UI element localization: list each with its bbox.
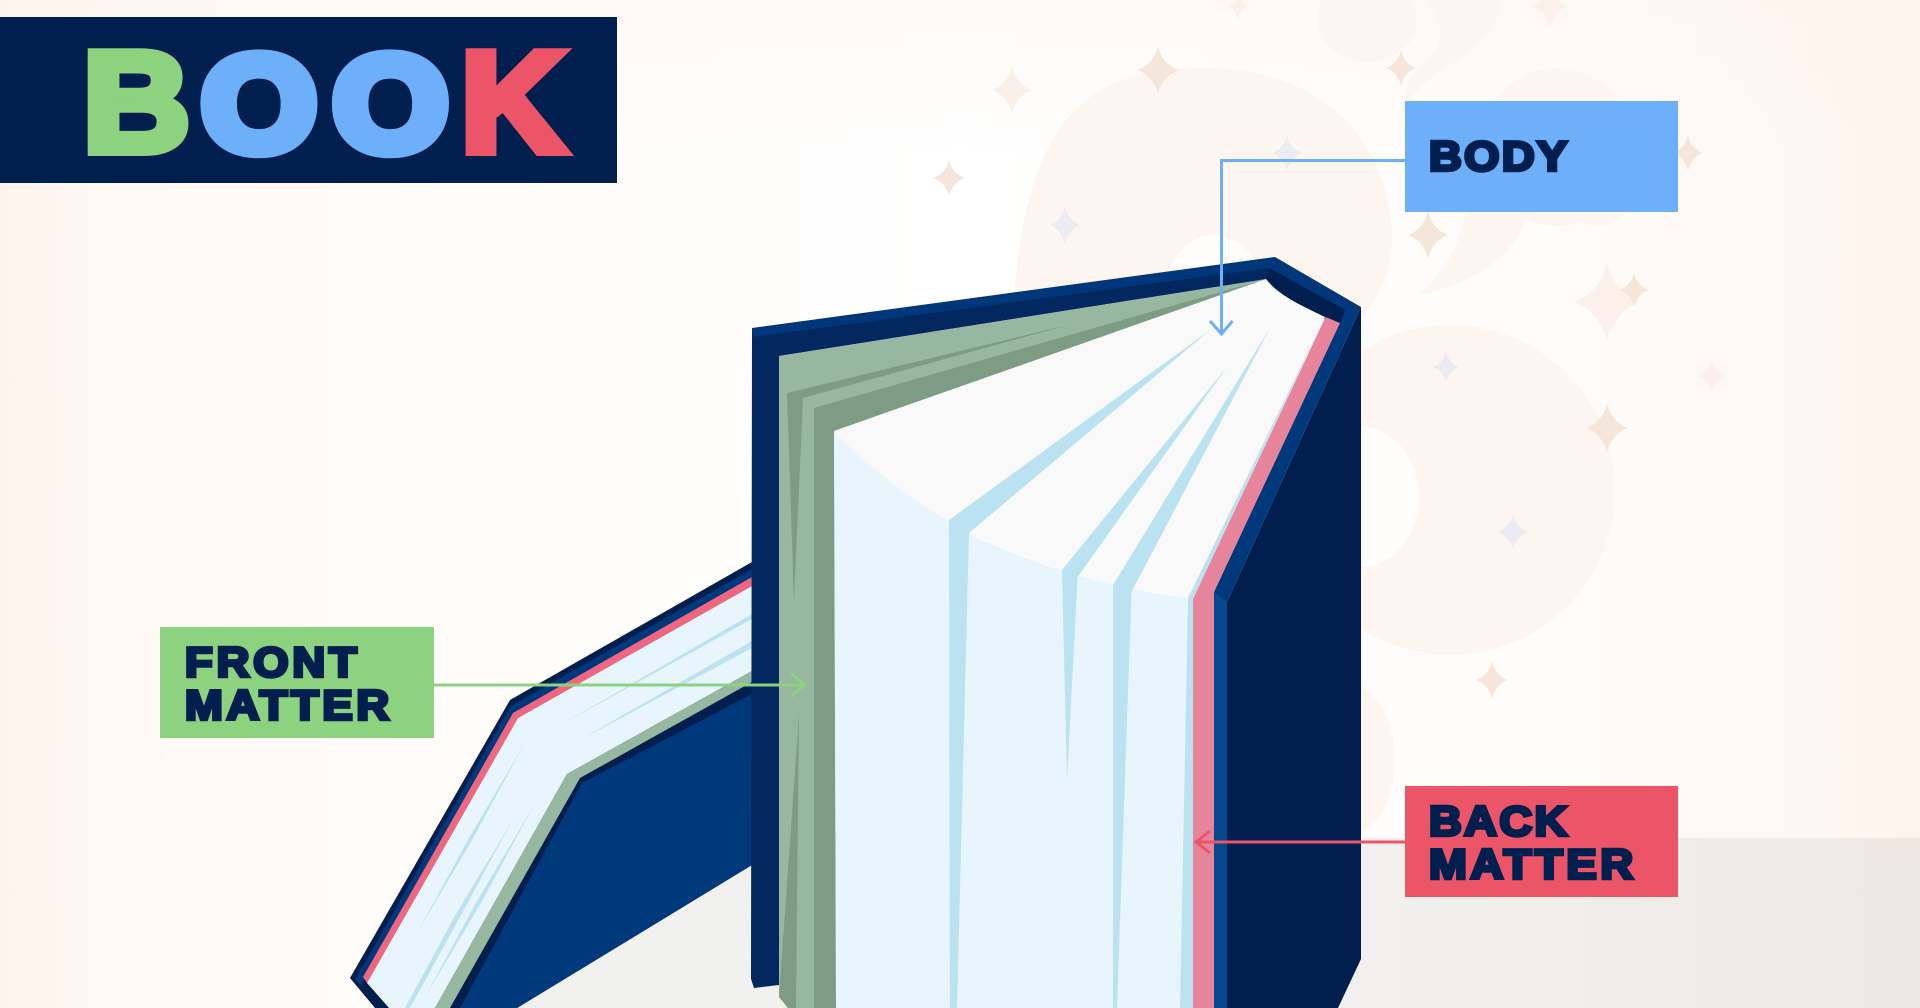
light blue page streaks bbox=[949, 317, 1325, 1008]
title letter O: O bbox=[334, 30, 448, 179]
callout: back matter: BACK bbox=[1429, 798, 1568, 845]
title letter O: O bbox=[202, 30, 316, 179]
spine stripe bbox=[1214, 307, 1361, 1008]
arrow: front matter bbox=[434, 673, 804, 697]
green page edge bbox=[435, 671, 752, 1008]
top page surface bbox=[834, 279, 1325, 598]
front pages bbox=[367, 586, 752, 1008]
callout: body: BODY bbox=[1429, 133, 1567, 180]
background blob holes bbox=[1162, 235, 1419, 567]
pink endpaper edge bbox=[363, 577, 752, 983]
green front matter pages bbox=[779, 279, 1266, 1008]
title letter B: B bbox=[83, 23, 190, 182]
arrow: back matter bbox=[1196, 831, 1405, 853]
callout: body bbox=[1405, 101, 1678, 212]
title letter K: K bbox=[461, 23, 565, 182]
arrow: body bbox=[1210, 160, 1405, 334]
callout: back matter bbox=[1405, 786, 1678, 897]
callout: front matter: MATTER bbox=[185, 682, 389, 729]
back cover navy bbox=[1227, 307, 1361, 1008]
front cover inner bbox=[751, 268, 1269, 988]
dark corner bbox=[1266, 268, 1345, 323]
dark green page edges bbox=[779, 279, 1266, 1008]
main book bbox=[751, 257, 1361, 1008]
callout: front matter bbox=[160, 627, 434, 738]
inner cover blue bbox=[460, 694, 752, 1008]
cover blue edge bbox=[355, 569, 752, 985]
top cover blue band bbox=[752, 257, 1361, 345]
callout: back matter: MATTER bbox=[1429, 841, 1633, 888]
pink back matter strip bbox=[1193, 317, 1340, 1008]
opened front cover and front pages bbox=[350, 562, 752, 1008]
callout: front matter: FRONT bbox=[185, 639, 357, 686]
floor bbox=[516, 838, 1920, 1008]
sparkle stars bbox=[933, 0, 1726, 699]
front body pages bbox=[834, 431, 1188, 1008]
title bar bbox=[0, 17, 617, 183]
background quotation blobs bbox=[1011, 0, 1634, 840]
cover outline bbox=[350, 562, 752, 1008]
page streaks bbox=[405, 614, 752, 1008]
